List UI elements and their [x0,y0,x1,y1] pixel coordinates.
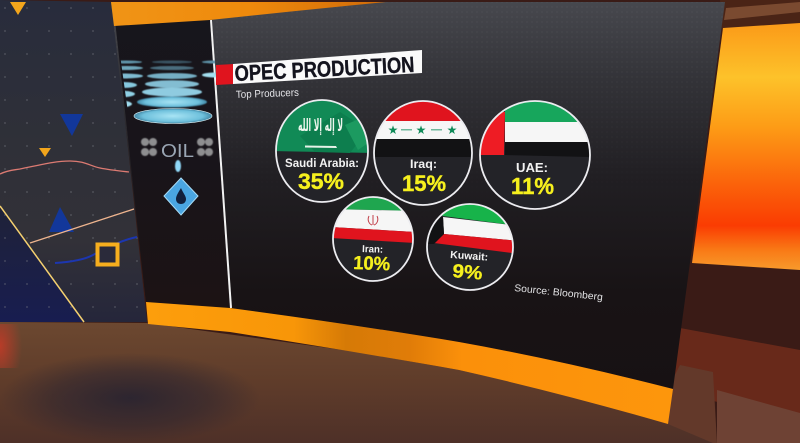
icon: orange triangle top [10,2,26,15]
value: 15% [402,171,446,196]
barrel section background [113,2,231,308]
flag: Iraq: ★ [416,123,426,137]
flag: Iran [334,198,412,243]
right wall and floor section [640,328,800,443]
white title box [233,50,422,84]
value: 10% [353,253,391,275]
studio floor [0,322,713,443]
oil label: OIL [161,141,194,161]
icon: yellow square [98,244,118,264]
circle: Iran [330,190,416,281]
glow [175,160,181,172]
red title tab [216,64,234,85]
bottom orange band [146,302,673,424]
flag: Kuwait [428,204,512,253]
title [216,50,422,86]
flag: Iraq: ★ [447,123,457,137]
icon: small orange triangle [39,148,51,157]
label: Iran: [362,244,383,256]
flag: UAE [478,100,592,157]
value: 11% [511,173,554,199]
right orange video wall [692,23,800,270]
label: Kuwait: [450,249,489,264]
peach line [30,209,134,243]
white divider [211,20,231,308]
left chart wall [0,0,147,322]
flag: Iraq: ★ [388,123,398,137]
source note: Source: Bloomberg [514,283,603,303]
flag: Saudi Arabia: لا إله إلا الله [298,116,343,136]
oil barrel image [120,60,216,216]
logo right [197,138,213,156]
value: 35% [298,169,344,194]
subtitle: Top Producers [236,87,299,101]
blue line [55,237,137,263]
barrel lids [120,60,216,108]
icon: blue down triangle [60,114,83,136]
flag: Iraq [375,102,471,157]
circle: UAE [478,100,592,209]
red line chart [0,161,129,174]
icon: oil drop diamond [164,178,198,215]
circle: Kuwait [426,203,514,291]
label: UAE: [516,161,548,175]
yellow diagonal line [0,206,84,322]
label: Saudi Arabia: [285,156,359,170]
value: 9% [452,261,483,285]
label: Iraq: [410,157,437,171]
circle: Saudi Arabia [275,99,369,203]
main display panel [111,2,725,424]
circle: Iraq [370,100,476,205]
icon: blue up triangle [49,207,74,232]
top orange band [111,2,386,26]
logo left [141,138,157,156]
title text: OPEC PRODUCTION [234,52,415,86]
